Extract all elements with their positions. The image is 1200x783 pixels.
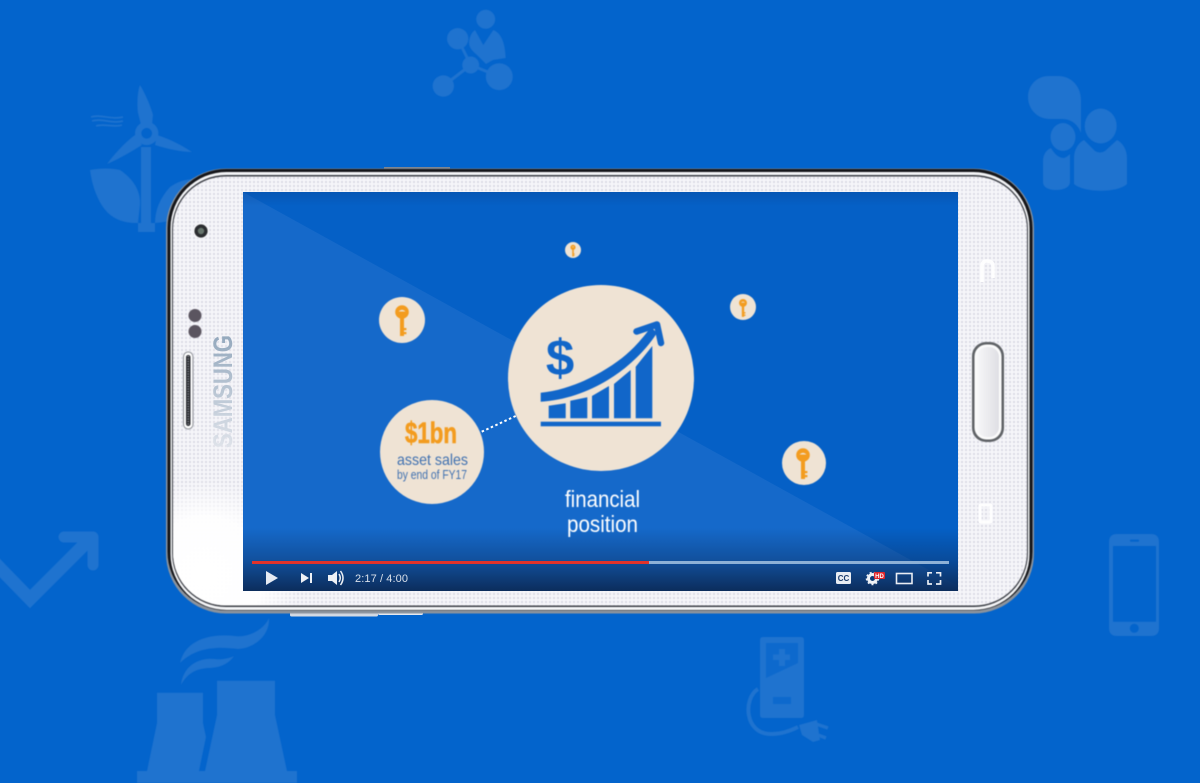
- captions button: CC: [838, 574, 849, 583]
- icon: cooling towers with smoke: [137, 618, 297, 783]
- next button: [301, 573, 312, 583]
- main circle: financial growth chart: [508, 285, 694, 471]
- icon: battery charger with plug: [748, 637, 828, 742]
- key bubble lower right: [782, 441, 826, 485]
- brand name: SAMSUNG: [208, 335, 238, 448]
- recent apps key: [980, 505, 991, 522]
- key bubble top: [565, 242, 581, 258]
- icon: wind turbine with leaves: [90, 85, 195, 232]
- back key: [982, 261, 993, 282]
- phone: [166, 167, 1034, 616]
- icon: check mark with arrow: [0, 537, 93, 599]
- player gradient: [243, 528, 958, 591]
- callout: asset sales: [380, 400, 484, 504]
- callout: asset sales: $1bn: [405, 417, 457, 450]
- phone side buttons: [290, 167, 450, 616]
- caption: financial position: financial: [565, 486, 640, 512]
- callout: asset sales: asset sales: [397, 452, 468, 469]
- progress bar: [252, 561, 949, 564]
- lighter diagonal panel: [243, 192, 958, 591]
- key bubble left: [379, 297, 425, 343]
- caption: financial position: [565, 486, 640, 537]
- rising arrow: [541, 324, 661, 402]
- home button: [972, 342, 1004, 442]
- phone frame: [166, 168, 1034, 614]
- icon: people network: [433, 10, 513, 97]
- captions button: [836, 572, 851, 584]
- play button: [266, 571, 278, 585]
- theater mode button: [896, 574, 912, 584]
- icon: speech bubble and people: [1028, 76, 1127, 191]
- settings button with HD badge: [866, 572, 885, 584]
- sensors: [188, 309, 202, 338]
- dollar sign: $: [546, 329, 574, 386]
- fullscreen button: [928, 573, 940, 584]
- bars: [541, 346, 661, 426]
- speaker grille: [184, 352, 193, 429]
- dotted connector: [482, 416, 516, 432]
- key bubble right: [730, 294, 756, 320]
- camera: [193, 223, 209, 239]
- time display: 2:17 / 4:00: [355, 573, 408, 585]
- video screen: [243, 192, 958, 591]
- caption: financial position: position: [567, 511, 638, 537]
- volume button: [328, 571, 343, 585]
- icon: smartphone: [1109, 534, 1159, 636]
- settings button with HD badge: HD: [875, 574, 884, 580]
- callout: asset sales: by end of FY17: [397, 467, 467, 482]
